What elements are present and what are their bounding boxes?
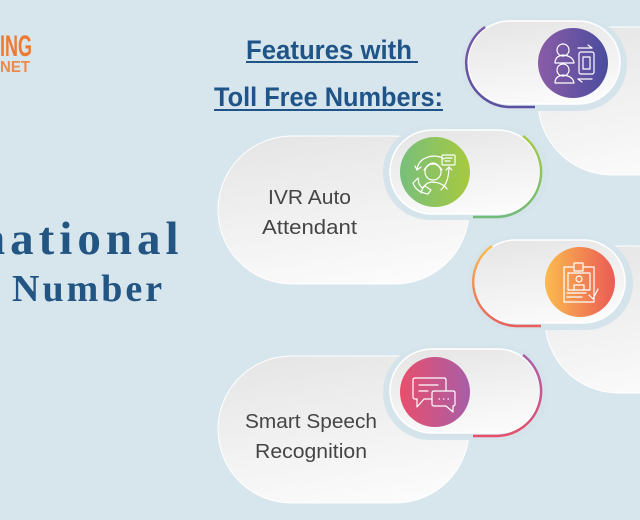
panel: Smart Speech Recognition <box>218 345 549 503</box>
card text <box>245 411 377 463</box>
panel: right middle feature card <box>467 236 640 393</box>
heading: features <box>214 35 443 112</box>
icon: id card <box>545 247 615 317</box>
main title: Number <box>12 268 165 310</box>
panel: IVR Auto Attendant <box>218 125 549 284</box>
pill <box>468 21 620 104</box>
card text <box>262 187 357 239</box>
heading: features: Features with <box>246 35 412 65</box>
main title <box>0 213 184 310</box>
pill <box>474 240 625 323</box>
card body <box>538 27 640 175</box>
panel: top right feature card <box>461 17 640 175</box>
icon: agents and phone <box>538 28 608 98</box>
card text: IVR Auto <box>268 187 351 209</box>
card body <box>218 356 469 503</box>
accent arc <box>473 136 541 217</box>
pill <box>390 349 540 433</box>
pill <box>390 130 540 214</box>
card text: Attendant <box>262 217 357 239</box>
card text: Smart Speech <box>245 411 377 433</box>
accent arc <box>473 246 541 326</box>
heading: features: Toll Free Numbers: <box>214 82 443 112</box>
halo <box>467 236 633 330</box>
icon: chat bubbles <box>400 357 470 427</box>
logo: NET <box>0 59 30 76</box>
accent arc <box>473 355 541 436</box>
halo <box>383 125 549 220</box>
halo <box>461 17 627 111</box>
card body <box>545 246 640 393</box>
logo: ING <box>0 30 32 63</box>
card text: Recognition <box>255 441 367 463</box>
icon: headset agent <box>400 137 470 207</box>
logo <box>0 30 32 76</box>
card body <box>218 136 469 284</box>
accent arc <box>466 27 535 107</box>
halo <box>383 345 549 440</box>
